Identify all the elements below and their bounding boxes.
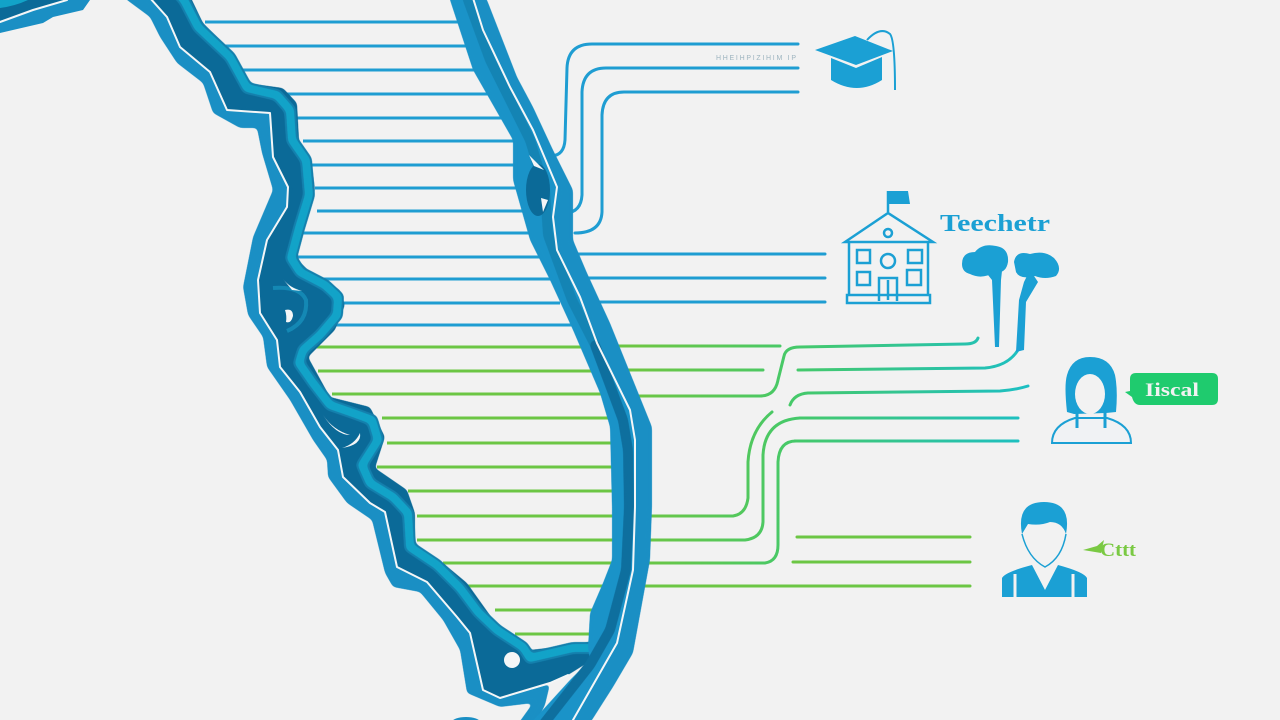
callout: green speech bubble: [1125, 373, 1218, 405]
green horizontal map lines: [312, 347, 620, 634]
callout: green student label: Cttt: [1100, 540, 1137, 561]
faint caption: HHEIHPIZIHIM IP: [716, 55, 796, 62]
coastline: eastern knot: [526, 155, 616, 618]
icon: right tree: [1014, 253, 1059, 352]
coastline: knot holes and crescents: [283, 279, 520, 668]
callout: green student label: [1083, 540, 1137, 561]
coastline: eastern shore: [447, 0, 652, 720]
icon: left tree: [962, 245, 1008, 347]
connector lines to trees and teacher: [610, 338, 1028, 563]
blue horizontal map lines: [205, 22, 575, 325]
coastline: western shore: [112, 0, 600, 720]
connector lines to school: [570, 254, 825, 302]
icon: male student: [1002, 502, 1087, 597]
icon: graduation cap: [815, 31, 895, 90]
coastline: top-left inlet: [0, 0, 90, 33]
icon: school building: [845, 191, 933, 303]
icon: female teacher: [1052, 357, 1131, 443]
coastline: bottom inlet: [452, 717, 480, 720]
connector lines to student: [645, 537, 970, 586]
connector lines to graduation cap: [552, 44, 798, 233]
heading: teachers label: Teechetr: [940, 211, 1050, 237]
callout: green speech bubble: Iiscal: [1145, 380, 1199, 401]
